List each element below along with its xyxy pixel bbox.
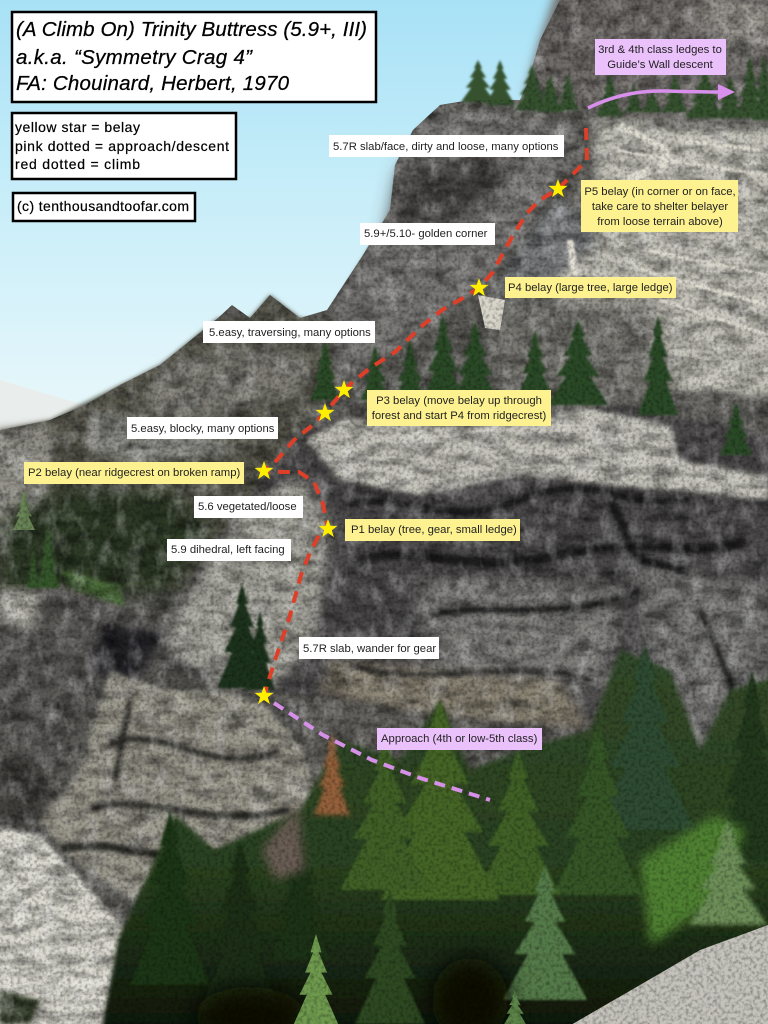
pale birch tree xyxy=(689,820,767,925)
distant snow ridge xyxy=(0,380,85,450)
right pale strata xyxy=(530,118,768,395)
label: 5.7R slab/face xyxy=(329,135,564,157)
upper crag pale patch xyxy=(690,0,768,50)
title box: (A Climb On) Trinity Buttress (5.9+, III) xyxy=(16,18,367,41)
pale slab xyxy=(165,475,330,690)
belay stars xyxy=(254,179,568,704)
label: P3 belay xyxy=(367,390,551,426)
label: P3 belay: P3 belay (move belay up through xyxy=(376,395,542,407)
label: 5.7R slab/face: 5.7R slab/face, dirty and loose, many options xyxy=(333,141,559,153)
pale strata highlights on right buttress xyxy=(570,125,768,335)
star: start xyxy=(254,686,274,704)
lower forest mass xyxy=(100,650,768,1024)
title box: FA: Chouinard, Herbert, 1970 xyxy=(16,72,290,95)
legend box: yellow star = belay xyxy=(15,119,140,135)
label: 5.easy blocky: 5.easy, blocky, many options xyxy=(131,423,275,435)
label: P1 belay xyxy=(345,519,520,541)
label: descent ledges xyxy=(595,39,726,75)
label: 5.easy traversing: 5.easy, traversing, many options xyxy=(209,327,371,339)
label: 5.7R slab wander xyxy=(299,637,439,659)
main wall top light band xyxy=(305,408,768,500)
label: P4 belay: P4 belay (large tree, large ledge) xyxy=(508,282,673,294)
label: 5.easy traversing xyxy=(203,321,375,343)
label: 5.easy blocky xyxy=(127,417,278,439)
label: 5.9 dihedral: 5.9 dihedral, left facing xyxy=(171,544,285,556)
label: golden corner: 5.9+/5.10- golden corner xyxy=(364,228,488,240)
pale distant rock xyxy=(140,345,310,415)
lower buttress shadow xyxy=(490,300,680,400)
label: golden corner xyxy=(360,223,495,245)
dead pink-grey tree xyxy=(262,805,305,880)
label: 5.6 vegetated xyxy=(194,496,303,518)
title box xyxy=(12,12,376,102)
route: red dotted climb xyxy=(264,128,587,696)
label: P5 belay: P5 belay (in corner or on face, xyxy=(584,186,736,198)
star: P5 xyxy=(548,179,568,197)
copyright box xyxy=(13,193,195,221)
label: P1 belay: P1 belay (tree, gear, small ledge) xyxy=(351,524,517,536)
slab conifers xyxy=(217,583,275,690)
wall mid streaks xyxy=(420,580,620,690)
upper crag rock xyxy=(525,0,768,120)
outcrop shadows xyxy=(60,700,290,856)
slab beside route xyxy=(490,195,600,310)
grass patch xyxy=(60,570,125,610)
label: P2 belay: P2 belay (near ridgecrest on broken ramp) xyxy=(28,467,240,479)
legend box xyxy=(12,113,236,179)
label: P5 belay: take care to shelter belayer xyxy=(592,201,728,213)
far-left slope xyxy=(0,295,335,590)
label: P2 belay xyxy=(24,462,244,484)
star: P1 xyxy=(318,519,338,537)
star: P4 xyxy=(470,278,488,296)
label: descent ledges: 3rd & 4th class ledges to xyxy=(598,44,722,56)
label: descent ledges: Guide’s Wall descent xyxy=(607,59,714,71)
cliff dark streak xyxy=(385,150,520,240)
left conifers xyxy=(26,526,60,588)
label: approach: Approach (4th or low-5th class) xyxy=(381,733,538,745)
copyright box: (c) tenthousandtoofar.com xyxy=(17,198,189,214)
star: intermediate xyxy=(316,403,334,421)
dark forest floor left xyxy=(195,987,305,1024)
rust coloured dead tree xyxy=(314,733,350,815)
title box: a.k.a. “Symmetry Crag 4” xyxy=(16,46,253,69)
label: P5 belay: from loose terrain above) xyxy=(597,216,723,228)
bright small conifers xyxy=(293,934,527,1024)
dark forest lower left xyxy=(0,490,215,600)
label: 5.9 dihedral xyxy=(167,539,291,561)
route: pink dotted approach xyxy=(274,703,490,800)
label: P5 belay xyxy=(581,180,738,232)
wall dark shadows xyxy=(345,489,750,770)
top ridge trees xyxy=(461,54,768,120)
left dark hill xyxy=(0,585,170,815)
P4 ledge pale rock xyxy=(478,295,505,330)
label: 5.6 vegetated: 5.6 vegetated/loose xyxy=(198,501,297,513)
bottom-right scree xyxy=(545,925,768,1024)
lower forest conifers xyxy=(130,645,768,1024)
star: P3 xyxy=(334,380,354,398)
legend box: pink dotted = approach/descent xyxy=(15,138,229,154)
label: P4 belay xyxy=(505,277,676,298)
label: 5.7R slab wander: 5.7R slab, wander for gear xyxy=(303,643,436,655)
bottom-left scree xyxy=(0,825,125,1024)
main wall xyxy=(160,405,768,800)
pale left conifer xyxy=(13,490,35,530)
green meadow xyxy=(640,815,745,945)
label: P3 belay: forest and start P4 from ridgecrest) xyxy=(372,410,547,422)
legend box: red dotted = climb xyxy=(15,156,140,172)
lower centre rock outcrop xyxy=(40,670,316,900)
upper tree band xyxy=(310,315,753,455)
left cliff of buttress xyxy=(328,110,580,380)
star: P2 xyxy=(254,461,274,479)
arrow: pink descent to Guide's Wall xyxy=(588,84,735,108)
label: approach xyxy=(377,728,542,750)
dark forest floor centre xyxy=(432,958,508,1024)
